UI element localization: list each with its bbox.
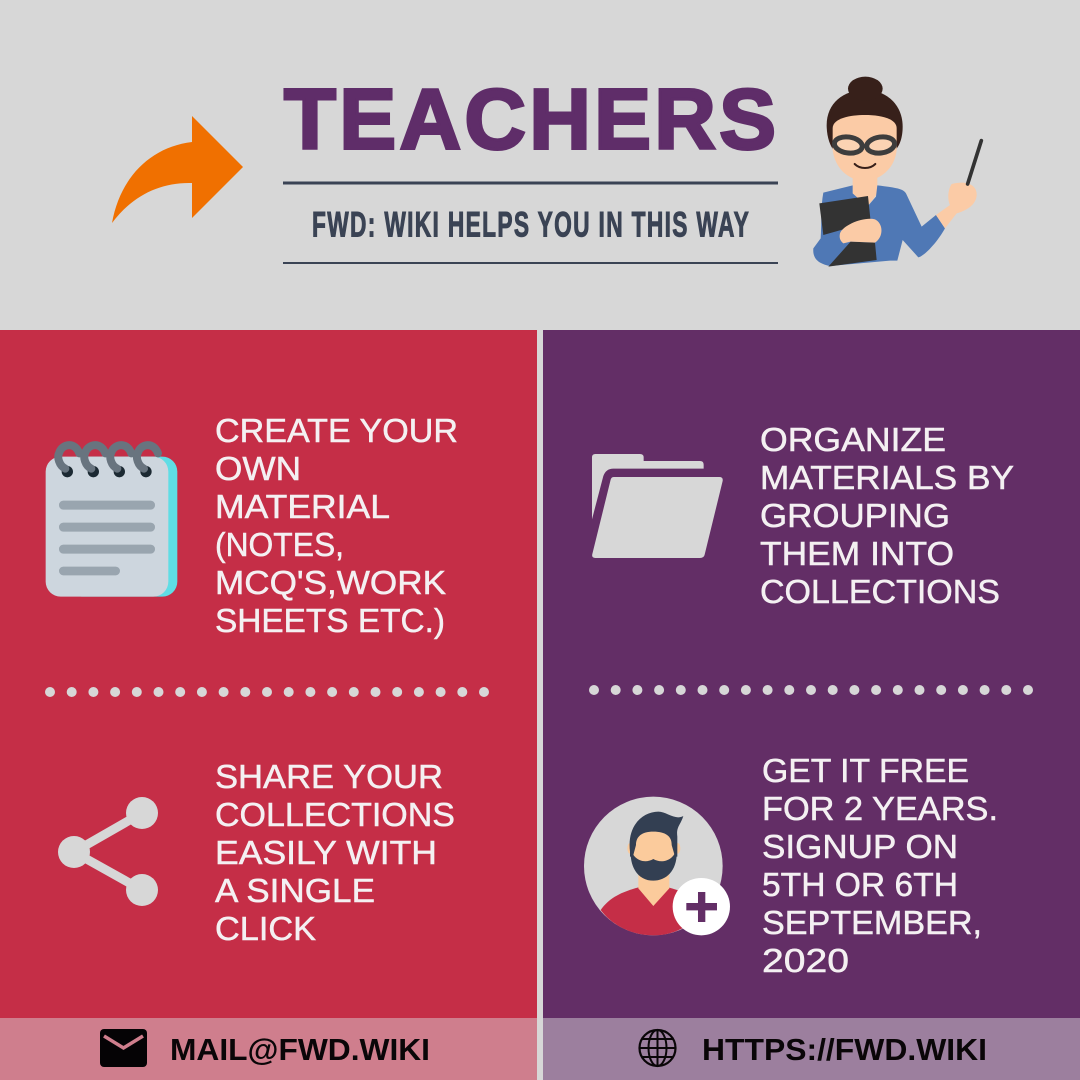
icon: envelope: [100, 1029, 147, 1067]
mail address: MAIL@FWD.WIKI: [170, 1032, 430, 1067]
text: get it free: SEPTEMBER,: [762, 905, 982, 942]
text: create your own material: [215, 413, 458, 640]
icon: user with plus: [584, 797, 730, 935]
text: get it free: 5TH OR 6TH: [762, 867, 958, 904]
text: organize materials: ORGANIZE: [760, 422, 946, 459]
text: organize materials: COLLECTIONS: [760, 574, 1000, 611]
text: create your own material: OWN: [215, 451, 301, 488]
text: organize materials: [760, 422, 1014, 611]
text: share your collections: COLLECTIONS: [215, 797, 455, 834]
text: get it free: [762, 753, 998, 980]
text: organize materials: GROUPING: [760, 498, 950, 535]
icon: folder: [592, 454, 723, 558]
text: share your collections: [215, 759, 455, 948]
text: create your own material: MATERIAL: [215, 489, 390, 526]
header: [112, 73, 981, 267]
panel: red: [0, 330, 537, 1018]
text: share your collections: SHARE YOUR: [215, 759, 443, 796]
icon: notepad: [46, 445, 177, 597]
footer: website: [543, 1018, 1080, 1080]
icon: share: [58, 797, 158, 906]
text: share your collections: CLICK: [215, 911, 316, 948]
icon: orange arrow: [112, 116, 243, 223]
text: share your collections: EASILY WITH: [215, 835, 437, 872]
text: create your own material: MCQ'S,WORK: [215, 565, 446, 602]
text: get it free: 2020: [762, 943, 849, 980]
text: get it free: SIGNUP ON: [762, 829, 958, 866]
icon: globe: [640, 1030, 676, 1066]
text: create your own material: (NOTES,: [215, 527, 344, 564]
text: organize materials: THEM INTO: [760, 536, 954, 573]
text: get it free: GET IT FREE: [762, 753, 969, 790]
website address: HTTPS://FWD.WIKI: [702, 1032, 987, 1067]
title: TEACHERS: [284, 73, 776, 168]
panel: purple: [543, 330, 1080, 1018]
text: organize materials: MATERIALS BY: [760, 460, 1014, 497]
subtitle: FWD: WIKI HELPS YOU IN THIS WAY: [312, 206, 749, 245]
footer: mail: [0, 1018, 537, 1080]
text: create your own material: CREATE YOUR: [215, 413, 458, 450]
text: get it free: FOR 2 YEARS.: [762, 791, 998, 828]
text: share your collections: A SINGLE: [215, 873, 375, 910]
text: create your own material: SHEETS ETC.): [215, 603, 445, 640]
icon: teacher: [813, 77, 981, 267]
